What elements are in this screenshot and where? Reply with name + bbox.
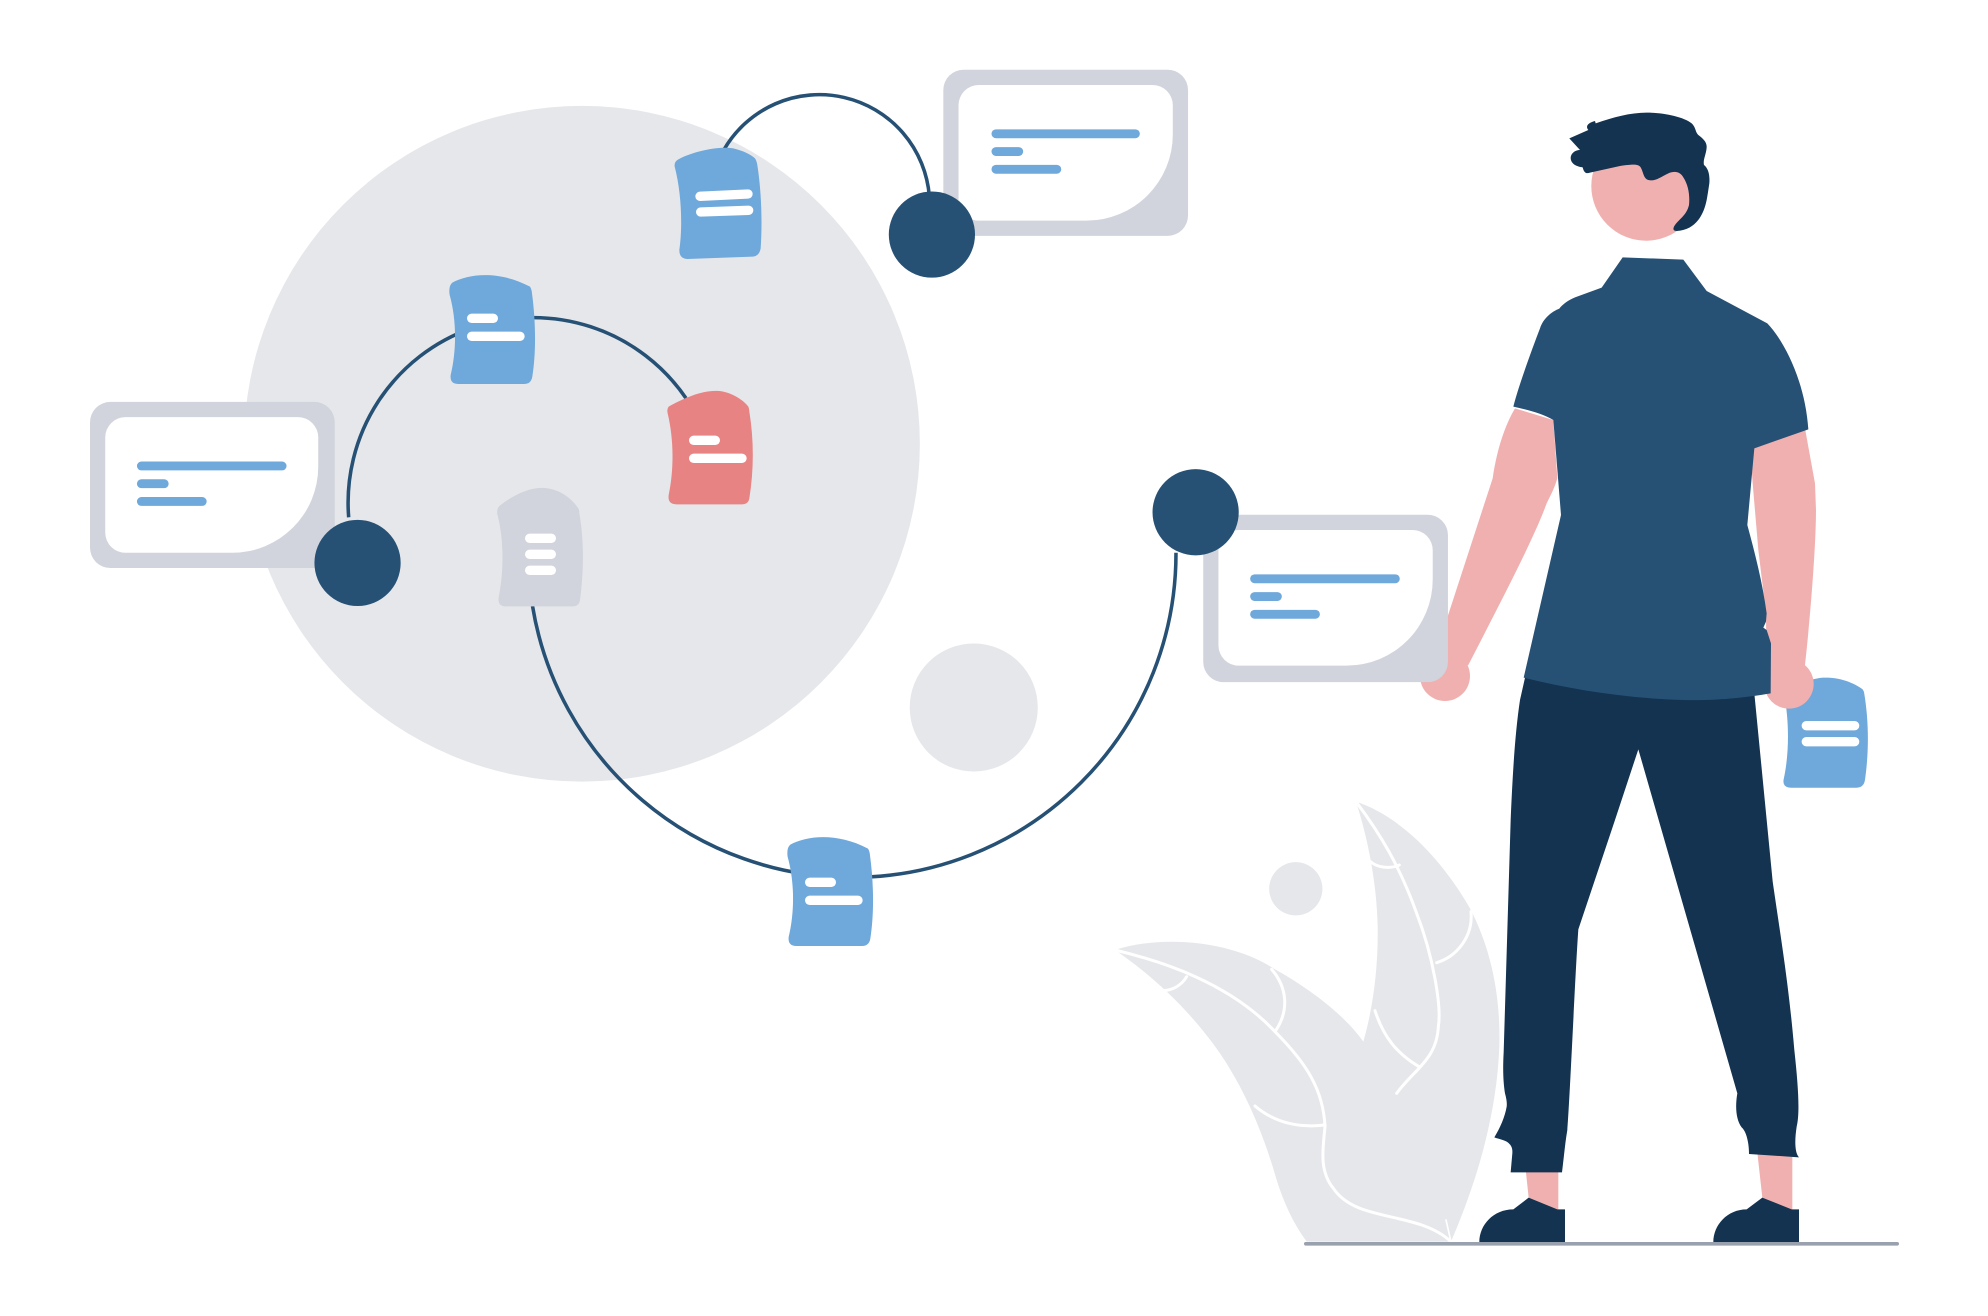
- card: top right: [943, 70, 1188, 236]
- document: held by person: [1783, 678, 1868, 788]
- person: ankles and shoes: [1479, 1147, 1799, 1242]
- node dots: [314, 191, 1239, 606]
- person: shirt: [1513, 257, 1808, 700]
- person: right arm and hand: [1750, 428, 1816, 709]
- document: bottom blue: [787, 837, 873, 946]
- connector rings: [348, 95, 1176, 877]
- document: red: [667, 391, 753, 504]
- card: centre right: [1203, 515, 1448, 682]
- document: top blue: [675, 148, 762, 259]
- ground line: [1304, 1242, 1899, 1246]
- card: left: [90, 402, 335, 568]
- plant: [1115, 802, 1499, 1242]
- background circles: [244, 106, 1322, 915]
- person: hair: [1569, 113, 1709, 231]
- person: head: [1569, 113, 1709, 241]
- document: middle blue: [449, 275, 535, 384]
- person: trousers: [1494, 673, 1799, 1172]
- document: grey: [497, 488, 583, 606]
- person: left arm: [1420, 408, 1557, 701]
